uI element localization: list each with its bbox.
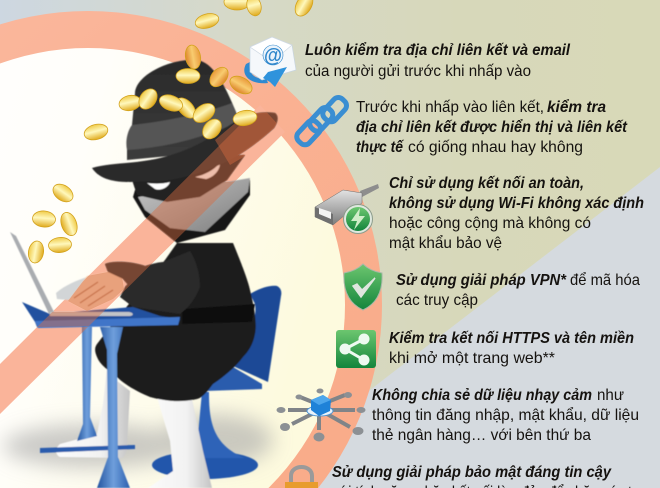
prohibition sign (0, 11, 382, 488)
text: tip 1 links and email: Luôn kiểm tra địa chỉ liên kết và email (305, 41, 571, 59)
face mask (132, 155, 245, 202)
hand (68, 271, 124, 311)
text: tip 4 VPN: các truy cập (396, 292, 478, 309)
back leg and shoe (56, 367, 130, 458)
table top (22, 302, 180, 328)
text: tip 2 compare links: có giống nhau hay không (408, 139, 583, 156)
text: tip 3 safe connections: hoặc công cộng mà không có (389, 215, 591, 232)
text: tip 7 security solution: Sử dụng giải pháp bảo mật đáng tin cậy (332, 464, 612, 481)
arm (120, 251, 200, 314)
text: tip 4 VPN: để mã hóa (570, 271, 640, 289)
text: tip 6 sensitive data: thông tin đăng nhập, mật khẩu, dữ liệu (372, 406, 639, 424)
icon: chain link (294, 95, 349, 147)
laptop (10, 232, 133, 316)
icon: email (244, 37, 296, 87)
text: tip 1 links and email: của người gửi trước khi nhấp vào (305, 63, 531, 80)
icon: share (336, 330, 376, 368)
sleeve cuff (105, 262, 148, 287)
text: tip 3 safe connections (389, 175, 644, 252)
text: tip 2 compare links: thực tế (356, 139, 405, 156)
eyes (147, 163, 220, 190)
chair (152, 286, 281, 479)
icon: data network (276, 388, 366, 442)
text: tip 6 sensitive data: như (597, 387, 624, 404)
text: tip 2 compare links (356, 98, 628, 156)
belt (182, 304, 255, 324)
collar and neck (133, 178, 250, 243)
text: tip 3 safe connections: mật khẩu bảo vệ (389, 234, 502, 252)
text: tip 2 compare links: Trước khi nhấp vào liên kết, (356, 99, 544, 116)
table legs (40, 327, 135, 453)
text: tip 7 security solution (332, 464, 660, 488)
text: tip 3 safe connections: Chỉ sử dụng kết nối an toàn, (389, 175, 584, 192)
torso (95, 243, 256, 401)
hat (92, 60, 278, 182)
text: tip 6 sensitive data (372, 387, 639, 444)
icon: shield (344, 264, 382, 310)
icon: email: @ (264, 45, 282, 67)
text: tip 5 HTTPS: khi mở một trang web** (389, 350, 555, 367)
text: tip 5 HTTPS (389, 329, 634, 367)
text: tip 4 VPN: Sử dụng giải pháp VPN* (396, 272, 567, 289)
text: tip 2 compare links: địa chỉ liên kết được hiển thị và liên kết (356, 118, 628, 136)
front leg and shoe (148, 397, 212, 488)
table stem (97, 327, 130, 488)
gold coins (27, 0, 316, 264)
icon: padlock (285, 467, 318, 488)
icon: network plug (315, 184, 379, 234)
text: tip 6 sensitive data: thẻ ngân hàng… với bên thứ ba (372, 427, 591, 444)
hacker at laptop illustration (10, 60, 281, 488)
floor shadow (3, 414, 273, 468)
text: tip 4 VPN (396, 271, 640, 309)
text: tip 2 compare links: kiểm tra (547, 98, 606, 116)
text: tip 1 links and email (305, 41, 571, 80)
text: tip 6 sensitive data: Không chia sẻ dữ liệu nhạy cảm (372, 387, 592, 404)
mouse hand (56, 277, 92, 300)
text: tip 5 HTTPS: Kiểm tra kết nối HTTPS và tên miền (389, 329, 634, 347)
translucent slash over hacker (37, 112, 278, 333)
